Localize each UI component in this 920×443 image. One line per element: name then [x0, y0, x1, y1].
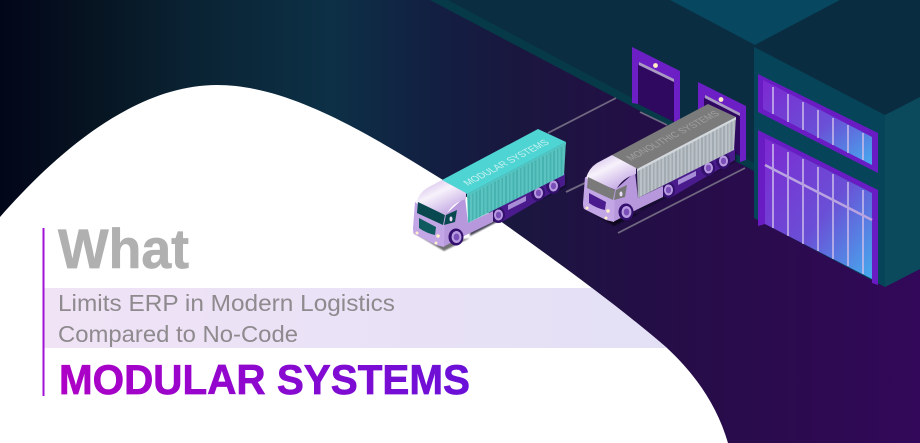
truck: monolithic systems — [582, 104, 736, 226]
dock door 1 — [632, 47, 680, 122]
dock door 2 — [698, 82, 746, 162]
building right face — [885, 97, 920, 287]
truck: modular systems — [412, 129, 566, 251]
warehouse building — [430, 0, 920, 287]
heading: modular systems: MODULAR SYSTEMS — [59, 356, 470, 403]
truck: monolithic systems: MONOLITHIC SYSTEMS — [623, 109, 722, 162]
upper window — [758, 74, 878, 173]
building front face — [754, 47, 885, 287]
parking bay lines — [548, 98, 745, 233]
wall base strip — [430, 0, 756, 172]
white curved panel — [0, 85, 728, 443]
subtitle text: Limits ERP in Modern Logistics — [58, 290, 395, 316]
vertical accent line — [42, 228, 44, 396]
lower large window — [758, 130, 878, 285]
truck: modular systems: MODULAR SYSTEMS — [460, 137, 552, 187]
roof light panel — [670, 0, 840, 45]
roof dark panel — [755, 0, 920, 115]
warehouse long wall — [430, 0, 920, 270]
subtitle band — [44, 288, 684, 348]
subtitle text — [58, 290, 395, 347]
heading: What: What — [58, 217, 189, 280]
subtitle text: Compared to No-Code — [58, 321, 298, 347]
